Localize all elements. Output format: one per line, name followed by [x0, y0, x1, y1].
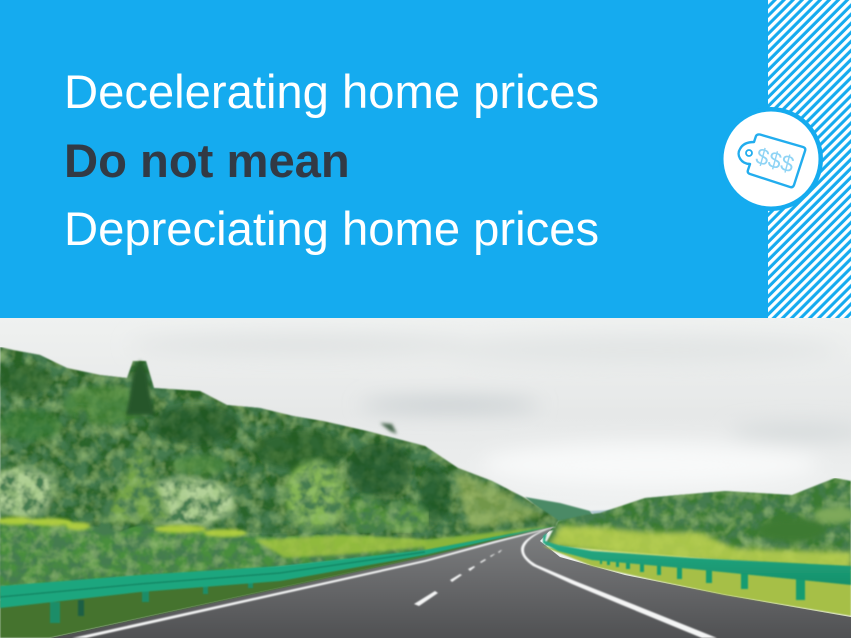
sky — [0, 318, 851, 638]
heading line 2: Do not mean — [64, 135, 350, 188]
icon: price tag — [724, 107, 823, 211]
left wooded hillside — [0, 347, 558, 600]
right guardrail — [543, 533, 851, 600]
decorative stripe band — [768, 0, 851, 318]
hedge along left guardrail — [0, 517, 555, 596]
grass verge left — [0, 527, 553, 638]
far blue-green hill — [525, 497, 632, 522]
grass verge right — [542, 546, 851, 616]
right bank vegetation — [545, 478, 851, 570]
foreground trees and light bushes — [0, 405, 429, 533]
photo: highway through green hills — [0, 318, 851, 638]
panel: blue header — [0, 0, 851, 318]
left guardrail — [0, 526, 553, 623]
heading line 3: Depreciating home prices — [64, 203, 599, 256]
road surface — [50, 527, 851, 638]
heading line 1: Decelerating home prices — [64, 66, 599, 119]
icon: price tag: $$$ — [753, 142, 797, 178]
road markings — [72, 527, 717, 638]
